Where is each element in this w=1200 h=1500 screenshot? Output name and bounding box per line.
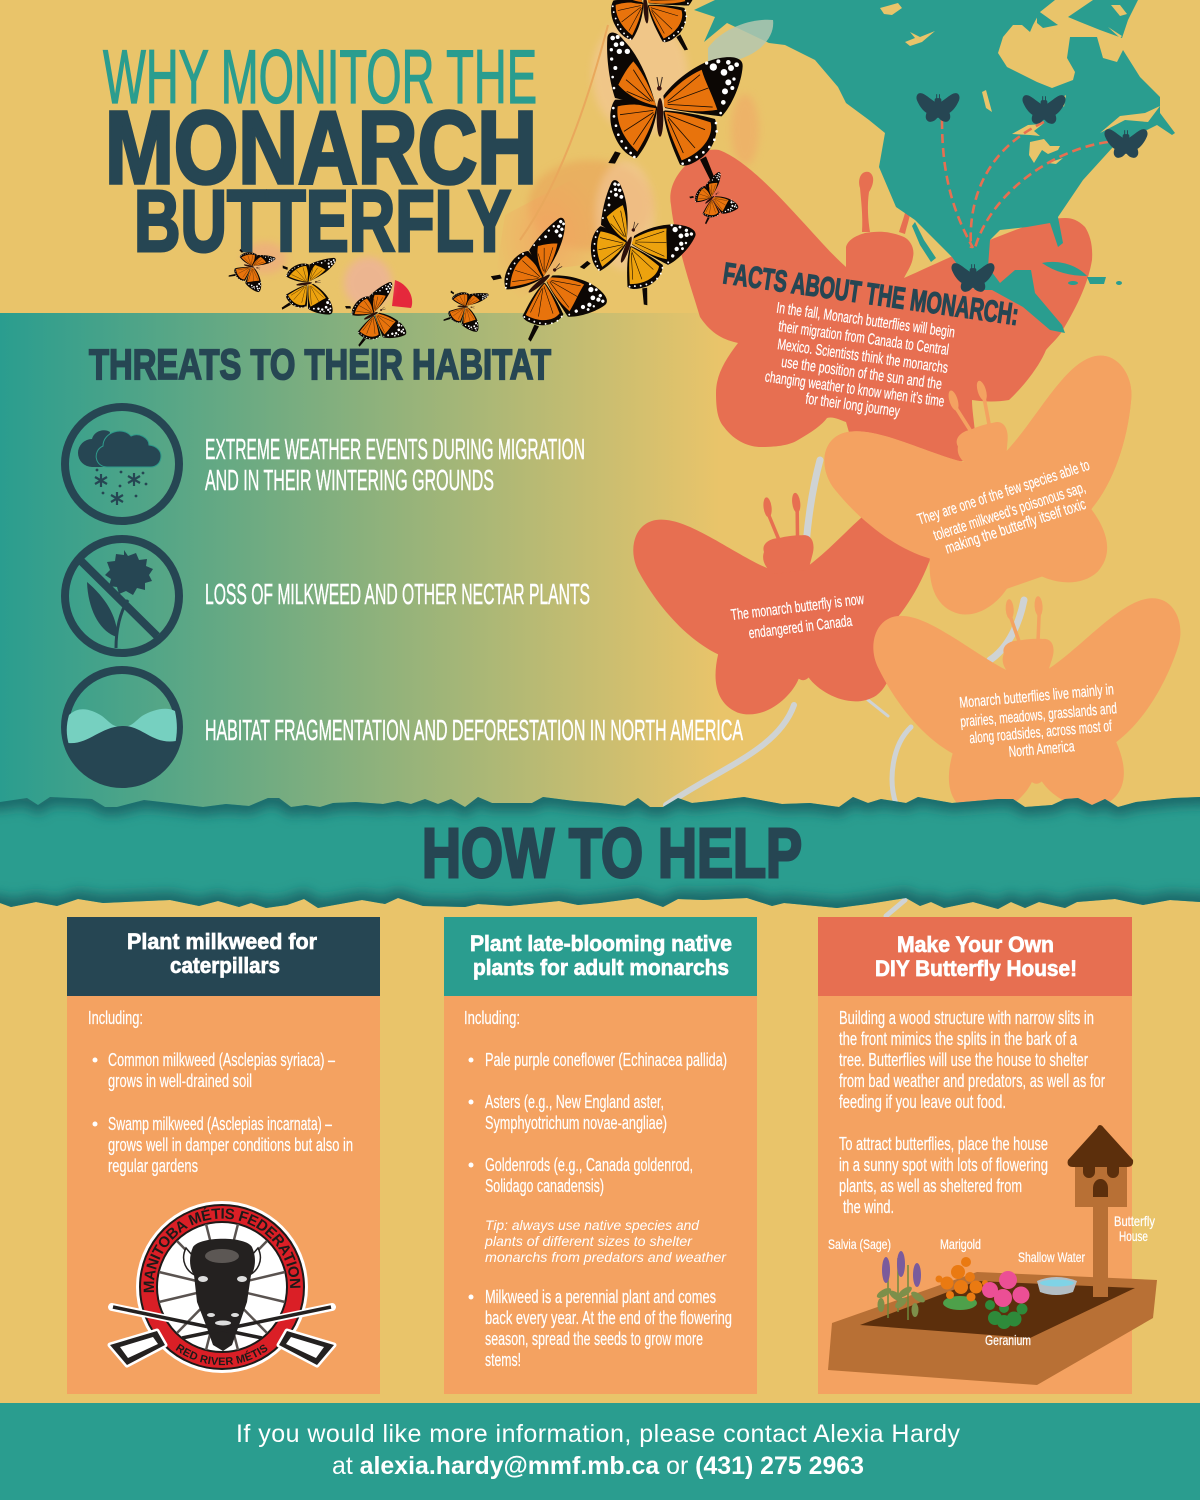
text: native plant list: plants of different sizes to shelter bbox=[484, 1233, 693, 1249]
labels: garden: Salvia (Sage) bbox=[828, 1236, 891, 1252]
icon: fragmented habitat bbox=[65, 670, 179, 785]
text: toxic fact: making the butterfly itself toxic bbox=[943, 496, 1088, 558]
geranium bbox=[982, 1271, 1030, 1329]
text: migration fact: changing weather to know when it’s time bbox=[764, 369, 945, 411]
text: milkweed list: Including: bbox=[88, 1008, 143, 1028]
text: toxic fact bbox=[915, 457, 1092, 558]
text: habitat fact: prairies, meadows, grasslands and bbox=[960, 700, 1118, 731]
text: milkweed list: grows in well-drained soil bbox=[108, 1071, 252, 1091]
monarch butterfly illustrations bbox=[227, 0, 745, 357]
text: butterfly house instructions: plants, as well as sheltered from bbox=[839, 1176, 1022, 1196]
text: native plant list: season, spread the seeds to grow more bbox=[485, 1329, 703, 1349]
labels: garden: House bbox=[1119, 1228, 1148, 1244]
text: habitat fact: Monarch butterflies live mainly in bbox=[959, 681, 1115, 712]
text: butterfly house instructions: tree. Butterflies will use the house to shelter bbox=[839, 1050, 1088, 1070]
text: native plant list: stems! bbox=[485, 1350, 521, 1370]
header: butterfly house: Make Your Own bbox=[897, 932, 1054, 957]
text: native plant list: Symphyotrichum novae-angliae) bbox=[485, 1113, 667, 1133]
text: migration fact: use the position of the sun and the bbox=[780, 354, 943, 393]
footer: contact bbox=[0, 1403, 1200, 1500]
footer: contact: at alexia.hardy@mmf.mb.ca or (431) 275 2963 bbox=[332, 1452, 864, 1480]
text: native plant list: Goldenrods (e.g., Canada goldenrod, bbox=[485, 1155, 693, 1175]
text: endangered fact bbox=[730, 591, 866, 642]
illustration: garden with butterfly house bbox=[828, 1125, 1157, 1385]
header: plant milkweed: caterpillars bbox=[170, 953, 280, 978]
text: threat one: EXTREME WEATHER EVENTS DURING MIGRATION bbox=[205, 434, 585, 466]
text: milkweed list: Common milkweed (Asclepias syriaca) – bbox=[108, 1050, 335, 1070]
salmon butterfly shape: endangered fact bbox=[628, 476, 960, 726]
map: migration paths bbox=[942, 120, 1108, 248]
text: migration fact: Mexico. Scientists think the monarchs bbox=[776, 336, 949, 377]
heading: facts about the monarch: FACTS ABOUT THE MONARCH: bbox=[721, 257, 1021, 332]
map: North America bbox=[694, 0, 1175, 333]
text: butterfly house instructions: from bad weather and predators, as well as for bbox=[839, 1071, 1105, 1091]
panel: threats gradient background bbox=[0, 313, 1200, 813]
title bbox=[103, 35, 537, 270]
text: native plant list: Asters (e.g., New England aster, bbox=[485, 1092, 664, 1112]
title: MONARCH bbox=[105, 90, 537, 205]
text: threat one: AND IN THEIR WINTERING GROUNDS bbox=[205, 465, 494, 497]
header: late-blooming plants bbox=[444, 917, 757, 996]
panel: butterfly house bbox=[818, 917, 1157, 1394]
logo: Manitoba Metis Federation bbox=[108, 1201, 336, 1373]
text: milkweed list bbox=[88, 1008, 353, 1176]
labels: garden: Butterfly bbox=[1114, 1213, 1155, 1229]
pale wing wash over map bbox=[708, 20, 773, 62]
title: BUTTERFLY bbox=[134, 173, 511, 270]
text: habitat fact: along roadsides, across most of bbox=[969, 718, 1113, 747]
text: native plant list: Including: bbox=[464, 1008, 520, 1028]
logo: Manitoba Metis Federation: RED RIVER MÉTIS bbox=[176, 1344, 268, 1366]
text: migration fact: their migration from Canada to Central bbox=[777, 318, 950, 359]
text: milkweed list: regular gardens bbox=[108, 1156, 198, 1176]
text: threat two: LOSS OF MILKWEED AND OTHER NECTAR PLANTS bbox=[205, 579, 590, 611]
text: butterfly house instructions: feeding if you leave out food. bbox=[839, 1092, 1006, 1112]
grey ribbon trails bbox=[666, 460, 1024, 916]
text: habitat fact bbox=[959, 681, 1118, 761]
salvia bbox=[875, 1251, 927, 1320]
text: native plant list: Tip: always use native species and bbox=[485, 1217, 700, 1233]
marigold bbox=[936, 1257, 988, 1310]
text: milkweed list: Swamp milkweed (Asclepias incarnata) – bbox=[108, 1114, 332, 1134]
header: plant milkweed bbox=[67, 917, 380, 996]
map: dark butterfly markers bbox=[916, 93, 1148, 292]
header: butterfly house bbox=[818, 917, 1132, 996]
text: endangered fact: endangered in Canada bbox=[748, 613, 853, 642]
text: migration fact: In the fall, Monarch butterflies will begin bbox=[775, 300, 956, 341]
text: native plant list bbox=[464, 1008, 732, 1370]
text: native plant list: back every year. At the end of the flowering bbox=[485, 1308, 732, 1328]
text: milkweed list: grows well in damper conditions but also in bbox=[108, 1135, 353, 1155]
panel: late-blooming plants bbox=[444, 917, 757, 1394]
text: native plant list: Solidago canadensis) bbox=[485, 1176, 604, 1196]
labels: garden bbox=[828, 1213, 1155, 1348]
header: plant milkweed: Plant milkweed for bbox=[127, 929, 317, 954]
panel: plant milkweed bbox=[67, 917, 380, 1394]
text: butterfly house instructions: in a sunny spot with lots of flowering bbox=[839, 1155, 1048, 1175]
text: native plant list: monarchs from predators and weather bbox=[485, 1249, 727, 1265]
text: butterfly house instructions: To attract butterflies, place the house bbox=[839, 1134, 1048, 1154]
text: threat three: HABITAT FRAGMENTATION AND DEFORESTATION IN NORTH AMERICA bbox=[205, 715, 743, 747]
labels: garden: Marigold bbox=[940, 1236, 981, 1252]
heading: threats to their habitat: THREATS TO THEIR HABITAT bbox=[89, 341, 551, 389]
text: butterfly house instructions: Building a wood structure with narrow slits in bbox=[839, 1008, 1094, 1028]
heading: how to help: HOW TO HELP bbox=[422, 814, 802, 892]
text: butterfly house instructions: the front mimics the splits in the bark of a bbox=[839, 1029, 1078, 1049]
text: toxic fact: tolerate milkweed’s poisonous sap, bbox=[931, 479, 1088, 544]
torn teal band bbox=[0, 797, 1200, 909]
text: native plant list: Pale purple coneflower (Echinacea pallida) bbox=[485, 1050, 727, 1070]
text: butterfly house instructions: the wind. bbox=[843, 1197, 894, 1217]
header: butterfly house: DIY Butterfly House! bbox=[875, 956, 1077, 981]
header: late-blooming plants: plants for adult monarchs bbox=[473, 955, 729, 980]
text: native plant list: Milkweed is a perennial plant and comes bbox=[485, 1287, 716, 1307]
text: habitat fact: North America bbox=[1008, 738, 1075, 761]
salmon facts butterfly shape bbox=[670, 150, 1092, 470]
title: WHY MONITOR THE bbox=[103, 35, 537, 120]
text: endangered fact: The monarch butterfly is now bbox=[730, 591, 866, 624]
labels: garden: Shallow Water bbox=[1018, 1249, 1085, 1265]
text: threat one bbox=[205, 434, 585, 497]
labels: garden: Geranium bbox=[985, 1332, 1031, 1348]
light butterfly shape: toxic fact bbox=[813, 339, 1181, 643]
icon: storm cloud bbox=[65, 407, 179, 521]
text: butterfly house instructions bbox=[839, 1008, 1105, 1217]
text: migration fact: for their long journey bbox=[804, 391, 901, 421]
text: migration fact bbox=[764, 300, 956, 421]
watercolour splashes behind butterflies bbox=[243, 15, 759, 310]
footer: contact: If you would like more information, please contact Alexia Hardy bbox=[236, 1420, 960, 1448]
text: toxic fact: They are one of the few species able to bbox=[915, 457, 1092, 529]
light butterfly shape: habitat fact bbox=[870, 586, 1192, 822]
header: late-blooming plants: Plant late-blooming native bbox=[470, 931, 732, 956]
logo: Manitoba Metis Federation: MANITOBA MÉTIS FEDERATION bbox=[144, 1207, 300, 1292]
icon: no flowers bbox=[65, 539, 179, 653]
re-layered toxic butterfly overlap bbox=[816, 349, 1178, 631]
